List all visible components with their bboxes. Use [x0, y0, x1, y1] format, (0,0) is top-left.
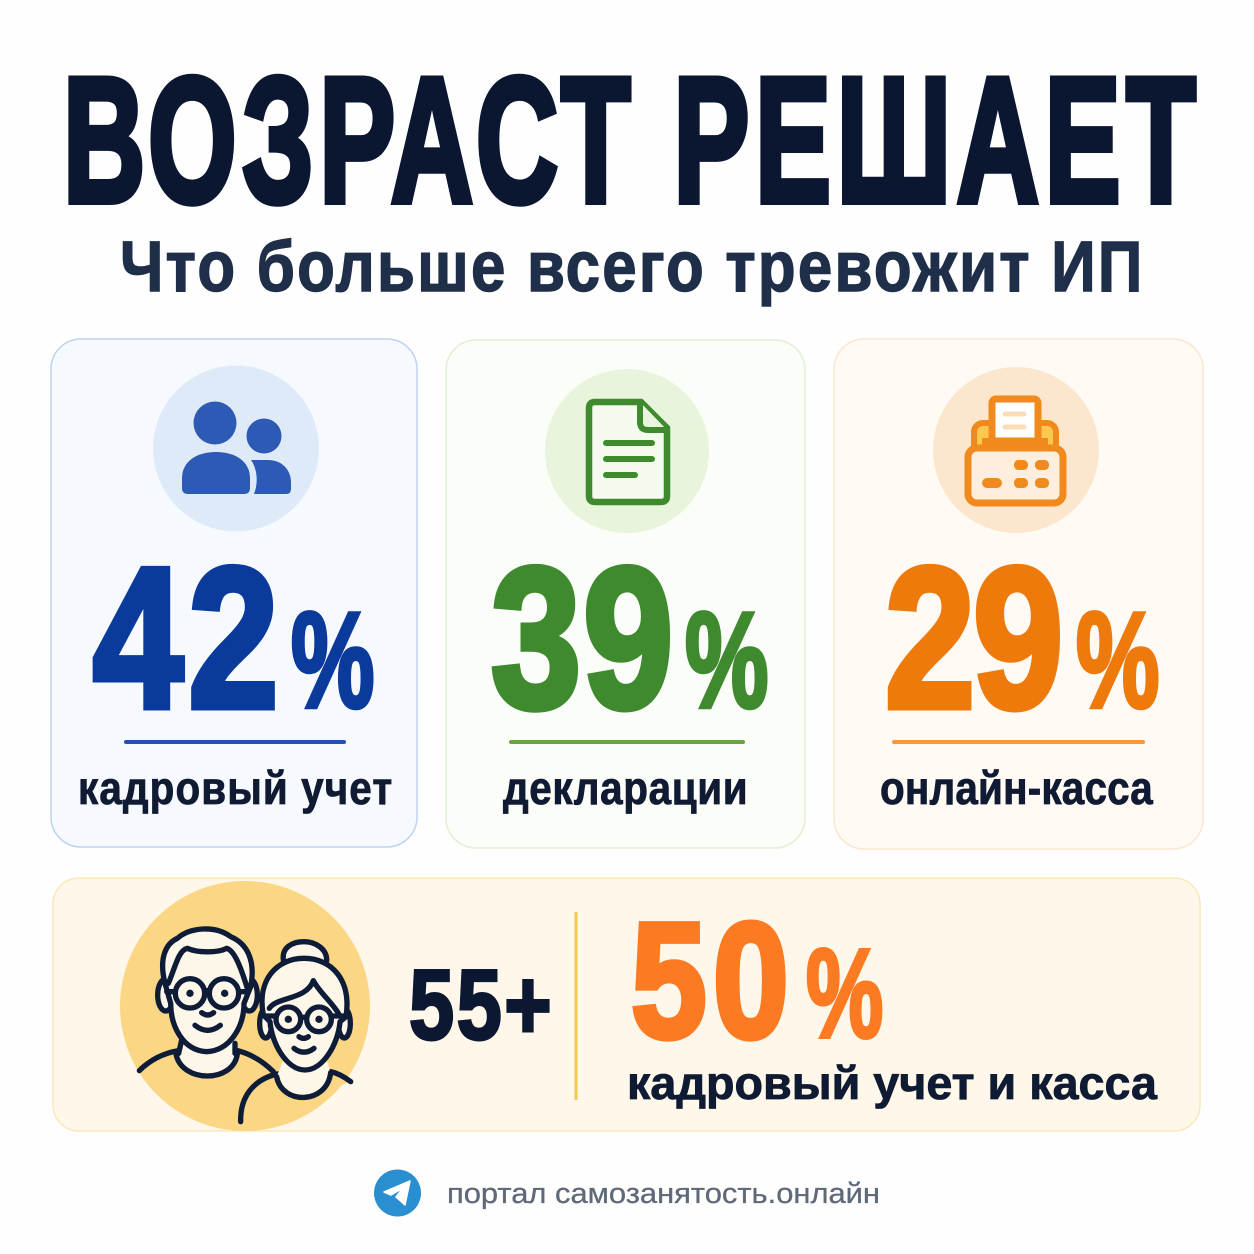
- value 39%: 39: [491, 526, 673, 750]
- icon: cash register: [933, 367, 1099, 533]
- text: 55+: 55+: [409, 950, 552, 1061]
- label: кадровый учет: [78, 764, 392, 815]
- divider line: [892, 740, 1145, 744]
- subtitle: Что больше всего тревожит ИП: [120, 228, 1142, 307]
- title: ВОЗРАСТ РЕШАЕТ: [63, 41, 1196, 240]
- footer: [374, 1170, 880, 1216]
- value 29%: [885, 526, 1159, 750]
- label: онлайн-касса: [880, 764, 1154, 815]
- icon: telegram: [374, 1170, 421, 1216]
- value 42%: [93, 526, 374, 750]
- value 42%: %: [291, 584, 374, 736]
- label: кадровый учет и касса: [627, 1057, 1157, 1109]
- source text: портал самозанятость.онлайн: [447, 1178, 880, 1210]
- value 42%: 42: [93, 526, 278, 750]
- icon: document: [545, 369, 709, 533]
- value 29%: %: [1076, 584, 1159, 736]
- divider line: [124, 740, 346, 744]
- label: декларации: [503, 764, 748, 815]
- vertical divider: [574, 912, 578, 1100]
- panel: 55+: [53, 878, 1200, 1131]
- panel: кадровый учет: [51, 339, 417, 847]
- value 29%: 29: [885, 526, 1063, 750]
- value 50%: %: [806, 923, 883, 1064]
- panel: онлайн-касса: [834, 339, 1203, 849]
- value 50%: 50: [631, 889, 789, 1072]
- divider line: [509, 740, 745, 744]
- panel: декларации: [446, 340, 805, 848]
- value 39%: [491, 526, 768, 750]
- value 39%: %: [685, 584, 768, 736]
- icon: elderly couple: [120, 881, 370, 1131]
- value 50%: [631, 889, 883, 1072]
- icon: people: [153, 366, 319, 532]
